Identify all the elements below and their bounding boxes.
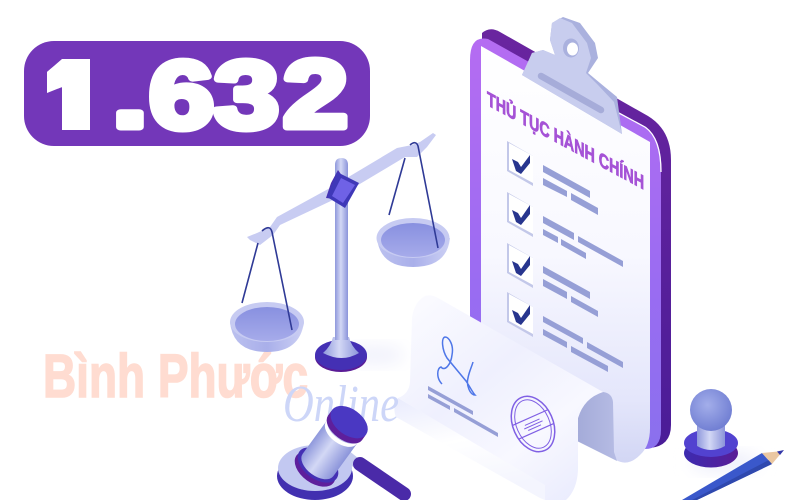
scroll lower strip (394, 398, 545, 500)
scale post (335, 158, 348, 340)
checklist item 3 (507, 243, 598, 317)
checklist item 4 (507, 292, 623, 372)
gavel sound block (277, 445, 353, 500)
stamp neck (697, 425, 725, 450)
icon: signature (438, 337, 475, 395)
left pan (230, 228, 304, 352)
scroll front sheet (398, 295, 603, 500)
scale shadow (345, 345, 405, 365)
gavel (277, 398, 404, 500)
signed document scroll (394, 295, 617, 500)
pencil (682, 450, 784, 500)
gavel head (288, 398, 375, 494)
banner: number 1.632: . (112, 41, 148, 148)
gavel handle (345, 454, 404, 494)
checklist item 1 (507, 141, 598, 215)
clipboard title: THỦ TỤC HÀNH CHÍNH (487, 86, 644, 194)
banner: number 1.632: 1 (38, 41, 94, 148)
watermark: Bình Phước: Bình Phước (43, 342, 308, 410)
stamp shadow (690, 452, 760, 472)
stamp handle (690, 389, 732, 431)
checklist item 2 (507, 192, 623, 267)
rubber stamp (684, 389, 760, 472)
metal clip (522, 17, 622, 134)
scroll inner curl (575, 392, 617, 461)
scale base (315, 337, 367, 372)
clipboard front board (470, 38, 661, 449)
banner: number 1.632: 2 (283, 41, 348, 148)
clipboard back edge (482, 29, 671, 448)
scale beam (247, 133, 436, 245)
banner: number 1.632: 6 (149, 42, 214, 149)
stamp base (684, 438, 738, 468)
banner: number 1.632: 3 (214, 42, 279, 149)
clipboard paper sheet (481, 46, 650, 463)
banner: number 1.632 (24, 41, 370, 149)
clipboard (470, 17, 671, 463)
scale clamp (326, 170, 359, 208)
right pan (376, 143, 450, 267)
icon: round stamp mark (503, 389, 563, 459)
signature text lines (428, 386, 498, 437)
watermark: Online: Online (283, 376, 399, 433)
scales of justice (230, 133, 450, 372)
